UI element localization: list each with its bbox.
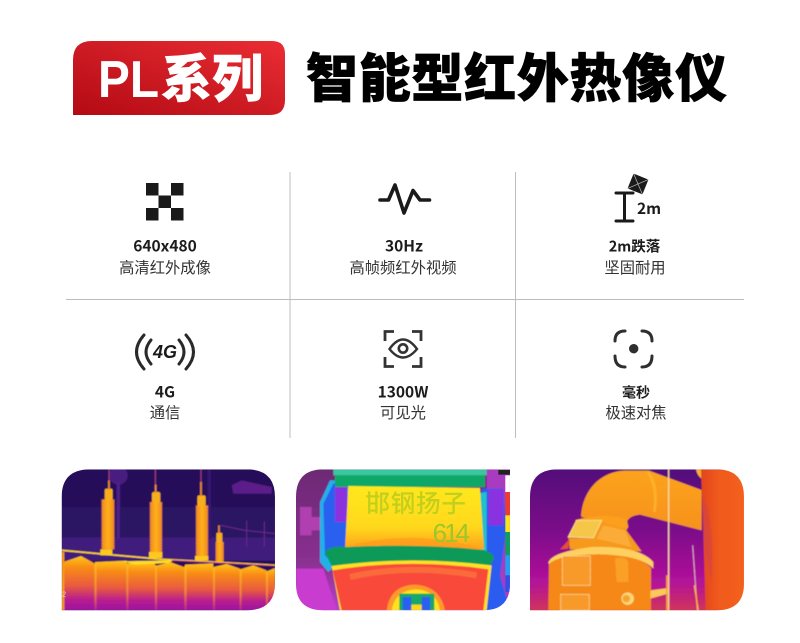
thermal photo: transformer: 2: [62, 590, 66, 599]
feature: 2m drop: 2m跌落: [609, 236, 661, 256]
feature: 1300W: 可见光: [380, 401, 426, 423]
feature: 640x480: 高清红外成像: [119, 256, 211, 278]
feature: 4G: 通信: [150, 401, 180, 423]
feature: 2m drop: 坚固耐用: [604, 256, 666, 278]
badge text: 系列: [161, 38, 263, 112]
thermal photo: ladle: 614: [433, 518, 470, 548]
title badge: [73, 38, 285, 115]
feature: 30Hz: 30Hz: [385, 234, 423, 256]
thermal photo: ladle: 邯钢扬子: [365, 484, 466, 520]
feature: 30Hz: 高帧频红外视频: [349, 256, 457, 278]
feature: 1300W: 1300W: [378, 380, 428, 402]
feature: 30Hz: [349, 185, 457, 278]
feature: 640x480: [119, 183, 211, 278]
feature: 1300W: [378, 332, 428, 423]
badge text: PL: [98, 51, 159, 109]
title: 智能型红外热像仪: [306, 37, 727, 112]
feature: 640x480: 640x480: [133, 234, 197, 256]
icon: 4G signal: 4G: [152, 342, 177, 362]
feature: 4G: [136, 335, 194, 423]
grid dividers: [66, 172, 744, 438]
thermal photo: industrial pipe: [530, 469, 744, 610]
icon: eye scan: [385, 332, 421, 366]
thermal photo: ladle: [296, 469, 510, 610]
thermal photo: transformer: [62, 469, 275, 610]
icon: resolution checker: [146, 183, 184, 220]
badge text: [98, 38, 263, 112]
feature: 4G: 4G: [155, 380, 175, 402]
feature: fast focus: 毫秒: [622, 382, 650, 402]
icon: waveform: [380, 185, 430, 213]
feature: fast focus: 极速对焦: [605, 401, 667, 423]
icon: drop height: 2m: [637, 197, 661, 219]
feature: fast focus: [605, 331, 667, 423]
feature: 2m drop: [604, 174, 666, 278]
icon: focus frame: [615, 331, 652, 367]
